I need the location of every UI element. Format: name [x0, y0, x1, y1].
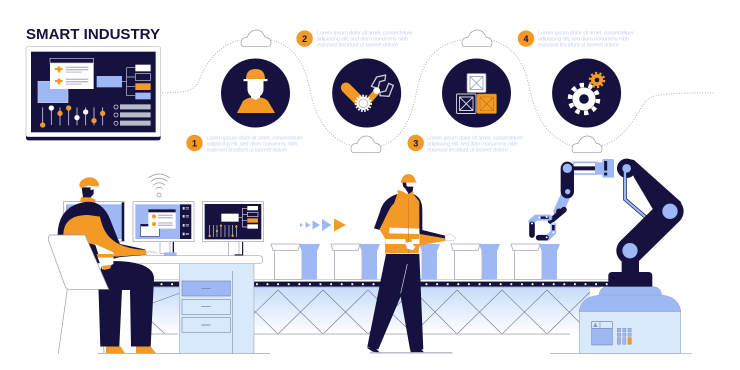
arrows: [300, 218, 346, 232]
monitor 3: [202, 202, 263, 255]
conveyor frame: [135, 280, 610, 334]
badge 2: [296, 30, 313, 47]
text 3: adipiscing elit, sed diam nonummy nibh: [427, 142, 518, 148]
chair legs: [58, 289, 104, 354]
step 4 circle: gears icon: [552, 58, 621, 128]
badge 2: 2: [302, 34, 307, 44]
worker upper body: [374, 174, 456, 253]
worker shoes: [106, 346, 156, 353]
text 4: euismod tincidunt ut laoreet dolore: [538, 42, 619, 48]
text 1: adipiscing elit, sed diam nonummy nibh: [206, 142, 298, 148]
machine base: [550, 260, 692, 353]
cabinet: [179, 262, 254, 354]
step 1 circle: worker icon: [221, 58, 290, 128]
text 3: euismod tincidunt ut laoreet dolore: [427, 148, 508, 154]
badge 1: 1: [192, 138, 197, 148]
step 2 circle: robot hand icon: [332, 58, 401, 127]
text 2: Lorem ipsum dolor sit amet, consectetuer: [317, 30, 413, 36]
badge 1: [186, 135, 203, 151]
text 4: Lorem ipsum dolor sit amet, consectetuer: [538, 30, 634, 36]
text 3: Lorem ipsum dolor sit amet, consectetuer: [427, 136, 523, 142]
cloud 1: [241, 30, 271, 47]
boxes on conveyor: [271, 244, 560, 280]
title: SMART INDUSTRY: [26, 27, 160, 43]
badge 4: 4: [523, 34, 529, 44]
badge 4: [518, 30, 534, 47]
badge 3: 3: [413, 138, 418, 148]
cloud 2: [351, 136, 381, 153]
standing worker: [367, 174, 456, 353]
text 4: adipiscing elit, sed diam nonummy nibh: [538, 36, 629, 42]
robot arm machine: [550, 159, 692, 353]
chair back: [48, 235, 109, 289]
cloud 3: [462, 30, 492, 47]
text 1: Lorem ipsum dolor sit amet, consectetuer: [206, 136, 303, 142]
worker legs: [367, 254, 452, 353]
gripper: [531, 210, 564, 238]
worker torso: [58, 177, 147, 270]
arm segments: [556, 159, 682, 258]
text 2: adipiscing elit, sed diam nonummy nibh: [317, 36, 408, 42]
tablet dashboard: [26, 47, 161, 140]
text 1: euismod tincidunt ut laoreet dolore: [206, 148, 288, 154]
monitor 2: [133, 202, 194, 256]
badge 3: [408, 135, 424, 151]
worker legs: [98, 261, 154, 346]
workstation: monitors, desk and cabinet: [63, 202, 263, 354]
cloud 4: [572, 136, 602, 153]
seated worker: [48, 177, 156, 354]
desk top: [110, 256, 263, 264]
text 2: euismod tincidunt ut laoreet dolore: [317, 42, 398, 48]
dotted connector path: [162, 40, 715, 146]
step 3 circle: crates icon: [442, 58, 511, 128]
wifi icon: [148, 174, 170, 197]
floor lines: [98, 352, 452, 354]
monitor 1: [63, 202, 124, 242]
